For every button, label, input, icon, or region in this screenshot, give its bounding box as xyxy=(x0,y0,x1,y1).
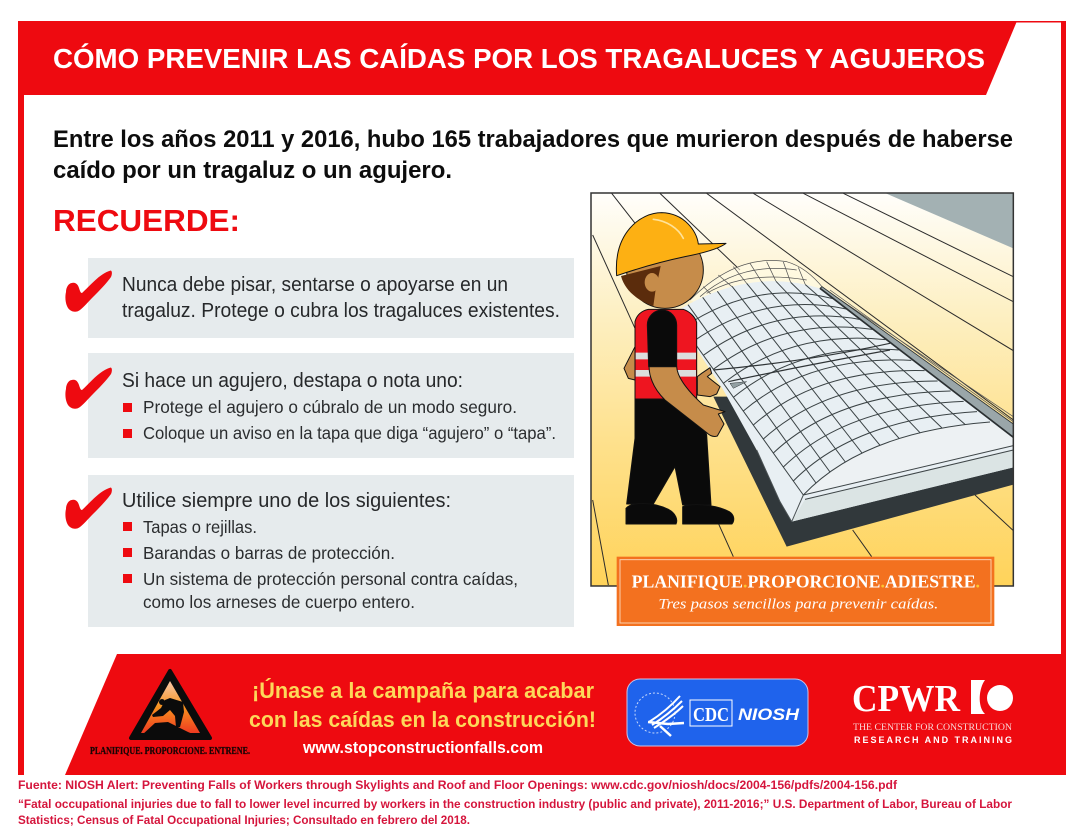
head xyxy=(626,254,704,309)
far hand xyxy=(697,368,720,397)
bullet list: como los arneses de cuerpo entero. xyxy=(143,592,415,612)
title: CÓMO PREVENIR LAS CAÍDAS POR LOS TRAGALUCES Y AGUJEROS xyxy=(53,43,985,74)
hair xyxy=(621,266,661,306)
reflective stripes xyxy=(636,353,696,377)
icon: check mark xyxy=(65,270,112,312)
icon: check mark xyxy=(65,368,112,409)
HHS seal xyxy=(635,693,684,736)
bullet list: Barandas o barras de protección. xyxy=(143,543,395,563)
callout tagline: Tres pasos sencillos para prevenir caídas. xyxy=(658,596,938,612)
icon: check mark xyxy=(65,488,112,529)
logo: HHS CDC NIOSH: CDC xyxy=(693,704,729,726)
illustration border xyxy=(591,193,1013,586)
logo: CPWR: CPWR xyxy=(852,678,961,720)
logo: CPWR: RESEARCH AND TRAINING xyxy=(854,735,1012,745)
CDC mark xyxy=(690,700,732,726)
campaign call to action: ¡Únase a la campaña para acabar xyxy=(252,678,594,703)
panel: never step on skylight xyxy=(65,258,574,338)
skylight curb xyxy=(713,397,1013,547)
safety vest xyxy=(635,309,697,399)
bullet list xyxy=(123,517,518,612)
source citations: Fuente: NIOSH Alert: Preventing Falls of Workers through Skylights and Roof and Floor Openings: www.cdc.gov/niosh/docs/2004-156/pdfs/2004-156.pdf xyxy=(18,780,897,792)
dome front face xyxy=(803,422,1013,495)
icon: warning sign with worker xyxy=(131,671,210,738)
source citations xyxy=(18,780,1013,827)
roof plank lines xyxy=(593,193,1013,585)
campaign call to action xyxy=(249,678,596,732)
trousers xyxy=(627,399,711,505)
boots xyxy=(626,503,734,524)
header banner xyxy=(18,21,1017,95)
campaign website: www.stopconstructionfalls.com xyxy=(302,739,543,757)
dome centre seam xyxy=(713,343,890,388)
intro statement: caído por un tragaluz o un agujero. xyxy=(53,157,452,184)
bullet list: Tapas o rejillas. xyxy=(143,517,257,537)
panel text: Nunca debe pisar, sentarse o apoyarse en un xyxy=(122,274,508,296)
logo: CPWR xyxy=(852,678,1013,745)
panel: if you make a hole xyxy=(65,353,574,458)
hard hat xyxy=(616,213,726,276)
sign slogan: PLANIFIQUE. PROPORCIONE. ENTRENE. xyxy=(90,746,250,757)
heading: recuerde: RECUERDE: xyxy=(53,203,240,238)
panel text xyxy=(122,274,560,322)
panel heading: Si hace un agujero, destapa o nota uno: xyxy=(122,370,463,392)
bullet list: Protege el agujero o cúbralo de un modo seguro. xyxy=(143,397,517,417)
bullet list xyxy=(123,397,556,443)
NIOSH mark: NIOSH xyxy=(738,705,800,724)
intro statement xyxy=(53,126,1013,184)
panel text: tragaluz. Protege o cubra los tragaluces existentes. xyxy=(122,300,560,322)
loose mesh overhang xyxy=(690,260,1013,422)
bullet list: Coloque un aviso en la tapa que diga “agujero” o “tapa”. xyxy=(143,423,556,443)
near arm and hand xyxy=(649,367,725,437)
bullet list: Un sistema de protección personal contra caídas, xyxy=(143,569,518,589)
panel: always use one of the following xyxy=(65,475,574,627)
logo: HHS CDC NIOSH xyxy=(627,679,808,746)
worker xyxy=(616,213,734,524)
dome far side xyxy=(820,287,1013,438)
illustration: worker beside skylight xyxy=(591,193,1013,626)
logo: CPWR: THE CENTER FOR CONSTRUCTION xyxy=(853,723,1012,733)
source citations: Statistics; Census of Fatal Occupational Injuries; Consultado en febrero del 2018. xyxy=(18,815,470,827)
campaign call to action: con las caídas en la construcción! xyxy=(249,707,596,732)
skylight dome xyxy=(673,260,1013,522)
protective mesh lines xyxy=(673,281,1013,495)
panel heading: Utilice siempre uno de los siguientes: xyxy=(122,490,451,512)
dome body xyxy=(673,281,1013,522)
ear xyxy=(645,273,659,292)
hat highlight xyxy=(653,219,683,238)
grey roof section xyxy=(885,193,1013,248)
source citations: “Fatal occupational injuries due to fall to lower level incurred by workers in the construction industry (public and private), 2011-2016;” U.S. Department of Labor, Bureau of Labor xyxy=(18,799,1013,811)
footer banner xyxy=(65,654,1066,775)
callout heading: PLANIFIQUE.PROPORCIONE.ADIESTRE. xyxy=(632,572,980,592)
sleeve xyxy=(647,310,677,367)
callout: plan provide train xyxy=(617,557,994,626)
far arm xyxy=(624,347,635,380)
intro statement: Entre los años 2011 y 2016, hubo 165 trabajadores que murieron después de haberse xyxy=(53,126,1013,153)
